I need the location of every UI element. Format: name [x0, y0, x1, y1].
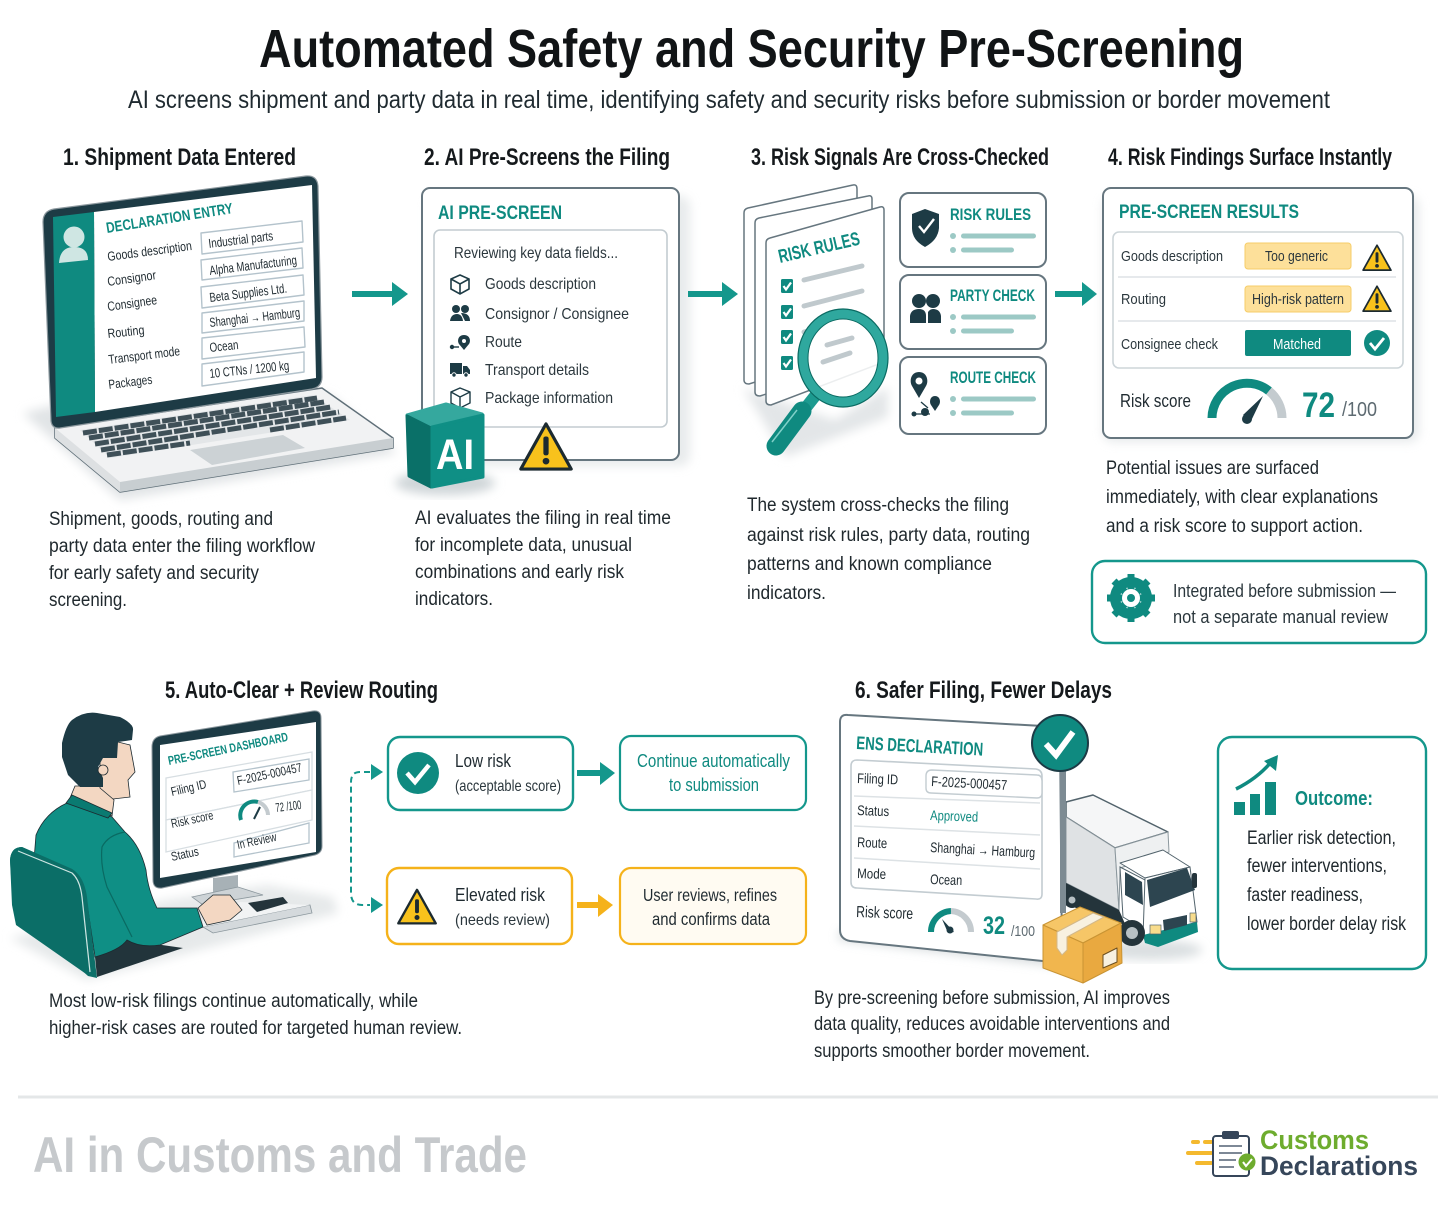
illustration: laptop with declaration entry form: Transport mode [108, 343, 181, 367]
illustration: person at monitor with dashboard: Status [170, 844, 200, 864]
body text: step 4: and a risk score to support action. [1106, 516, 1363, 537]
icon: AI cube [395, 404, 495, 495]
body text: step 1 [49, 509, 315, 611]
box: low risk: Low risk [455, 750, 512, 771]
card: risk rules [900, 193, 1046, 267]
card: ENS declaration: Risk score [856, 904, 913, 923]
list item: transport details [450, 362, 589, 379]
card: AI pre-screen: AI PRE-SCREEN [438, 203, 562, 224]
illustration: laptop with declaration entry form: Ocean [209, 337, 239, 355]
footer: series title: AI in Customs and Trade [33, 1127, 527, 1183]
card: pre-screen results: PRE-SCREEN RESULTS [1119, 202, 1299, 223]
illustration: laptop with declaration entry form [23, 176, 397, 500]
arrow: elevated risk to user review [577, 894, 613, 917]
card: ENS declaration: ENS DECLARATION [856, 732, 984, 760]
body text: step 6: data quality, reduces avoidable interventions and [814, 1014, 1170, 1035]
result row: routing [1121, 286, 1391, 312]
body text: step 2: for incomplete data, unusual [415, 535, 632, 556]
card: party check [900, 275, 1046, 349]
list item: package information: Package information [485, 390, 613, 407]
illustration: laptop with declaration entry form: Consignee [106, 292, 158, 314]
body text: step 2: combinations and early risk [415, 562, 624, 583]
risk score gauge: 72: /100 [1342, 399, 1377, 421]
logo: Customs Declarations: Declarations [1260, 1151, 1418, 1181]
list item: goods description: Goods description [485, 276, 596, 293]
arrow: low risk to continue [577, 762, 615, 785]
card: pre-screen results [1103, 188, 1419, 442]
icon: cardboard box [1043, 907, 1122, 983]
box: low risk [388, 737, 573, 810]
illustration: laptop with declaration entry form: Alpha Manufacturing [209, 252, 298, 278]
illustration: person at monitor with dashboard: F-2025-000457 [236, 761, 303, 788]
heading: step 5: 5. Auto-Clear + Review Routing [165, 677, 438, 704]
illustration: laptop with declaration entry form: Routing [107, 322, 145, 341]
callout: outcome [1218, 737, 1426, 969]
illustration: laptop with declaration entry form: 10 CTNs / 1200 kg [209, 358, 290, 381]
box: continue automatically: to submission [669, 775, 759, 795]
body text: step 6: supports smoother border movement. [814, 1041, 1090, 1062]
list item: route [450, 334, 522, 351]
callout: integrated before submission [1092, 561, 1426, 643]
body text: step 4: immediately, with clear explanations [1106, 487, 1378, 508]
illustration: laptop with declaration entry form: DECLARATION ENTRY [105, 200, 234, 237]
illustration: laptop with declaration entry form: Shanghai → Hamburg [209, 305, 301, 330]
body text: step 3: The system cross-checks the filing [747, 495, 1009, 516]
illustration: laptop with declaration entry form: Packages [108, 372, 153, 392]
box: user reviews: and confirms data [652, 909, 770, 929]
illustration: risk rules documents and magnifier: RISK RULES [776, 229, 862, 268]
body text: step 1: party data enter the filing workflow [49, 536, 315, 557]
card: AI pre-screen: Reviewing key data fields... [454, 245, 618, 262]
heading: step 1: 1. Shipment Data Entered [63, 144, 296, 171]
arrow: step 1 to step 2 [352, 282, 408, 306]
heading: step 3: 3. Risk Signals Are Cross-Checked [751, 144, 1049, 171]
illustration: person at monitor with dashboard: Filing ID [170, 777, 208, 799]
body text: step 3: indicators. [747, 583, 826, 604]
box: continue automatically: Continue automatically [637, 751, 790, 771]
body text: step 5: Most low-risk filings continue automatically, while [49, 991, 418, 1012]
result row: goods description [1121, 243, 1391, 270]
body text: step 4: Potential issues are surfaced [1106, 458, 1319, 479]
heading: step 6: 6. Safer Filing, Fewer Delays [855, 677, 1112, 704]
icon: gear [1107, 574, 1155, 622]
callout: integrated before submission: Integrated before submission — [1173, 581, 1396, 601]
list item: route: Route [485, 334, 522, 351]
callout: outcome: faster readiness, [1247, 885, 1363, 906]
heading: step 2: 2. AI Pre-Screens the Filing [424, 144, 670, 171]
result row: consignee check [1121, 330, 1390, 356]
result row: goods description: Goods description [1121, 248, 1223, 265]
card: ENS declaration [838, 715, 1066, 967]
result row: consignee check: Consignee check [1121, 336, 1218, 353]
title: Automated Safety and Security Pre-Screening [259, 19, 1244, 79]
callout: outcome: Earlier risk detection, [1247, 828, 1396, 849]
body text: step 3: against risk rules, party data, routing [747, 525, 1030, 546]
illustration: person at monitor with dashboard [10, 711, 338, 980]
risk score gauge: 72: Risk score [1120, 391, 1191, 411]
result row: routing: Routing [1121, 291, 1166, 308]
illustration: laptop with declaration entry form: Industrial parts [208, 228, 274, 251]
callout: outcome: lower border delay risk [1247, 914, 1406, 935]
illustration: truck [1064, 795, 1202, 960]
illustration: person at monitor with dashboard: PRE-SCREEN DASHBOARD [167, 730, 289, 768]
body text: step 1: screening. [49, 590, 127, 611]
illustration: laptop with declaration entry form: Goods description [106, 238, 193, 264]
icon: warning triangle [521, 424, 571, 469]
illustration: person at monitor with dashboard: Risk score [170, 808, 215, 831]
card: ENS declaration: /100 [1011, 923, 1035, 940]
box: low risk: (acceptable score) [455, 778, 561, 795]
panel: step 3 risk signals [743, 144, 1049, 604]
icon: approved check badge [1032, 715, 1088, 771]
card: ENS declaration: Status [857, 802, 889, 819]
card: ENS declaration: Shanghai → Hamburg [930, 839, 1036, 860]
callout: outcome: fewer interventions, [1247, 856, 1387, 877]
result row: goods description: Too generic [1265, 248, 1328, 265]
body text: step 2 [415, 508, 671, 610]
card: ENS declaration: Route [857, 834, 888, 851]
body text: step 3: patterns and known compliance [747, 554, 992, 575]
panel: step 4 risk findings [1092, 144, 1426, 643]
body text: step 4 [1106, 458, 1378, 537]
card: ENS declaration: Approved [930, 807, 978, 825]
box: user reviews: User reviews, refines [643, 885, 777, 905]
arrow: step 3 to step 4 [1055, 282, 1097, 306]
body text: step 6 [814, 988, 1170, 1062]
panel: step 2 AI pre-screen [395, 144, 690, 610]
body text: step 2: indicators. [415, 589, 493, 610]
body text: step 1: for early safety and security [49, 563, 259, 584]
list item: goods description [451, 275, 596, 294]
box: user reviews [620, 868, 806, 944]
illustration: risk rules documents and magnifier [743, 185, 888, 457]
logo: Customs Declarations: Customs [1260, 1125, 1369, 1155]
card: party check: PARTY CHECK [950, 286, 1036, 305]
box: elevated risk: (needs review) [455, 912, 550, 929]
result row: consignee check: Matched [1273, 336, 1321, 353]
box: continue automatically [620, 736, 806, 810]
card: ENS declaration: Mode [857, 865, 887, 882]
arrow: step 2 to step 3 [688, 282, 738, 306]
risk score gauge: 72 [1120, 383, 1377, 425]
result row: routing: High-risk pattern [1252, 291, 1344, 308]
card: ENS declaration: F-2025-000457 [931, 773, 1008, 793]
body text: step 3 [747, 495, 1030, 604]
panel: step 1 shipment data entered [23, 144, 397, 611]
illustration: person at monitor with dashboard: In Review [236, 830, 278, 852]
card: route check: ROUTE CHECK [950, 368, 1036, 387]
card: risk rules: RISK RULES [950, 205, 1031, 224]
panel: step 6 safer filing [838, 677, 1202, 983]
box: elevated risk [387, 868, 572, 944]
box: elevated risk: Elevated risk [455, 884, 546, 905]
connector: dashed split arrows [351, 764, 383, 913]
list item: consignor and consignee [450, 305, 629, 323]
illustration: laptop with declaration entry form: Consignor [106, 267, 157, 289]
logo: Customs Declarations [1188, 1125, 1418, 1181]
list item: package information [451, 388, 613, 408]
body text: step 5 [49, 991, 462, 1039]
body text: step 1: Shipment, goods, routing and [49, 509, 273, 530]
risk score gauge: 72: 72 [1302, 386, 1335, 425]
card: ENS declaration: Ocean [930, 871, 962, 888]
callout: outcome: Outcome: [1295, 788, 1373, 810]
body text: step 5: higher-risk cases are routed for targeted human review. [49, 1018, 462, 1039]
card: ENS declaration: 32 [983, 912, 1005, 940]
icon: AI cube: AI [436, 431, 474, 479]
body text: step 6: By pre-screening before submission, AI improves [814, 988, 1170, 1009]
callout: integrated before submission: not a separate manual review [1173, 607, 1389, 627]
panel: step 5 auto-clear and review routing [10, 677, 806, 1039]
list item: transport details: Transport details [485, 362, 589, 379]
icon: growth chart [1234, 755, 1278, 815]
card: route check [900, 357, 1046, 434]
card: ENS declaration: Filing ID [857, 770, 898, 787]
illustration: person at monitor with dashboard: 72 /100 [275, 798, 302, 815]
body text: step 2: AI evaluates the filing in real time [415, 508, 671, 529]
list item: consignor and consignee: Consignor / Consignee [485, 306, 629, 323]
illustration: laptop with declaration entry form: Beta Supplies Ltd. [209, 281, 288, 305]
card: AI pre-screen [422, 188, 690, 466]
